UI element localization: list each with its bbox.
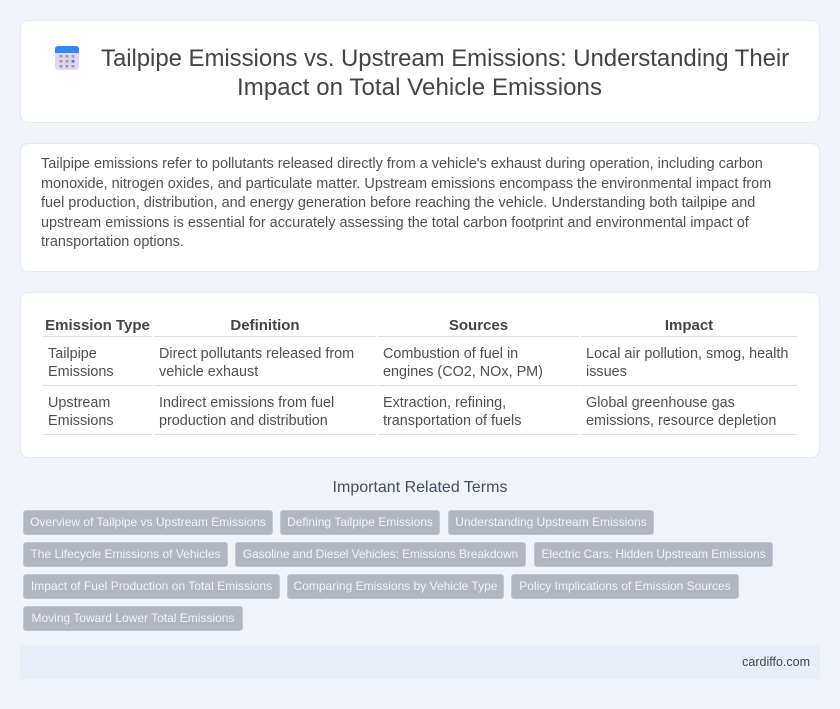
related terms chips: Gasoline and Diesel Vehicles: Emissions Breakdown xyxy=(243,547,518,561)
row: tailpipe: Tailpipe xyxy=(48,346,97,362)
row: upstream xyxy=(48,395,776,429)
comparison table xyxy=(43,317,797,435)
row: tailpipe: Combustion of fuel in xyxy=(383,346,518,362)
intro paragraph xyxy=(41,156,771,250)
related terms chips xyxy=(23,510,773,631)
related terms chips: Moving Toward Lower Total Emissions xyxy=(32,611,234,625)
table header: Impact xyxy=(665,317,713,334)
intro paragraph: fuel production, distribution, and energy generation before reaching the vehicle. Understanding both tailpipe and xyxy=(41,195,755,211)
related terms chips: Comparing Emissions by Vehicle Type xyxy=(294,579,497,593)
related terms chips: Policy Implications of Emission Sources xyxy=(519,579,731,593)
row: tailpipe xyxy=(48,346,788,380)
table header: Sources xyxy=(449,317,508,334)
intro paragraph: transportation options. xyxy=(41,234,184,250)
related terms chips: Electric Cars: Hidden Upstream Emissions xyxy=(541,547,766,561)
related terms chips: Overview of Tailpipe vs Upstream Emissions xyxy=(30,515,266,529)
row: tailpipe: Local air pollution, smog, health xyxy=(586,346,788,362)
title: Impact on Total Vehicle Emissions xyxy=(237,74,602,101)
table header: Emission Type xyxy=(45,317,150,334)
row: upstream: Emissions xyxy=(48,413,114,429)
row: tailpipe: issues xyxy=(586,364,627,380)
row: tailpipe: Emissions xyxy=(48,364,114,380)
icon: calendar xyxy=(55,46,79,70)
header card xyxy=(20,20,820,123)
row: upstream: production and distribution xyxy=(159,413,328,429)
row: upstream: Indirect emissions from fuel xyxy=(159,395,334,411)
related terms heading: Important Related Terms xyxy=(333,479,507,496)
table card xyxy=(20,292,820,458)
intro card xyxy=(20,143,820,272)
title xyxy=(101,45,789,101)
related terms chips: Understanding Upstream Emissions xyxy=(455,515,647,529)
row: tailpipe: engines (CO2, NOx, PM) xyxy=(383,364,543,380)
row: upstream: transportation of fuels xyxy=(383,413,521,429)
related terms chips: Defining Tailpipe Emissions xyxy=(287,515,433,529)
row: upstream: emissions, resource depletion xyxy=(586,413,776,429)
row: upstream: Upstream xyxy=(48,395,110,411)
intro paragraph: monoxide, nitrogen oxides, and particulate matter. Upstream emissions encompass the environmental impact from xyxy=(41,176,771,192)
table header: Definition xyxy=(230,317,300,334)
footer bar xyxy=(20,645,820,679)
footer credit: cardiffo.com xyxy=(742,655,810,669)
row: tailpipe: vehicle exhaust xyxy=(159,364,258,380)
row: tailpipe: Direct pollutants released from xyxy=(159,346,354,362)
intro paragraph: upstream emissions is essential for accurately assessing the total carbon footprint and environmental impact of xyxy=(41,214,749,230)
related terms chips: The Lifecycle Emissions of Vehicles xyxy=(30,547,221,561)
title: Tailpipe Emissions vs. Upstream Emissions: Understanding Their xyxy=(101,45,789,72)
row: upstream: Extraction, refining, xyxy=(383,395,506,411)
intro paragraph: Tailpipe emissions refer to pollutants released directly from a vehicle's exhaust during operation, including carbon xyxy=(41,156,763,172)
table header xyxy=(45,317,713,334)
related terms chips: Impact of Fuel Production on Total Emissions xyxy=(31,579,272,593)
row: upstream: Global greenhouse gas xyxy=(586,395,735,411)
